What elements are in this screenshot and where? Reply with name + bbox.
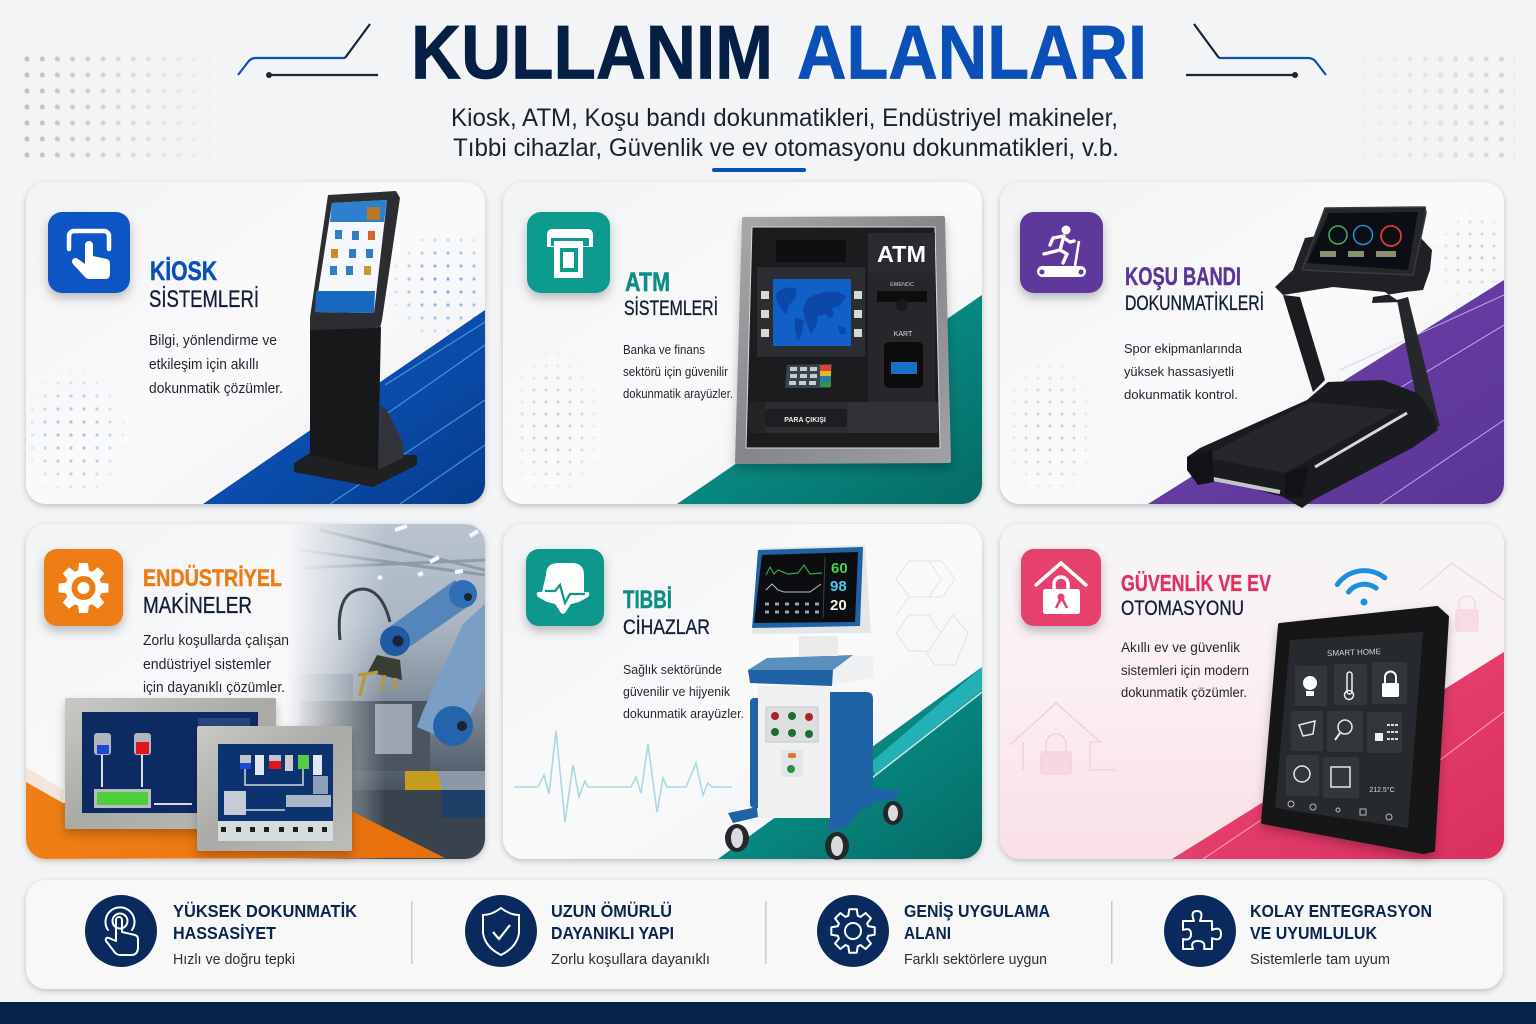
security heading: GÜVENLİK VE EV	[1121, 570, 1272, 596]
medical description	[623, 662, 744, 721]
illustration: treadmill	[1187, 207, 1440, 508]
title	[411, 10, 1147, 96]
footer band	[0, 1002, 1536, 1024]
industrial heading: ENDÜSTRİYEL	[143, 565, 282, 592]
panel: medical: CİHAZLAR	[623, 616, 710, 639]
illustration: medical device: 20	[830, 597, 847, 614]
decorative dots right	[1392, 56, 1515, 158]
panel: security and home automation	[1000, 524, 1504, 859]
illustration: ATM machine: ATM	[877, 241, 926, 267]
ATM heading: ATM	[625, 267, 670, 297]
illustration: ATM machine: EMENDC	[890, 282, 914, 288]
feature: integration: KOLAY ENTEGRASYON	[1250, 901, 1432, 921]
subtitle	[451, 104, 1119, 162]
illustration: ATM machine	[737, 218, 949, 462]
industrial description: endüstriyel sistemler	[143, 657, 271, 673]
industrial description: için dayanıklı çözümler.	[143, 680, 285, 696]
hexagon pattern	[896, 561, 968, 665]
panel: treadmill: DOKUNMATİKLERİ	[1125, 292, 1264, 315]
feature: touch sensitivity	[85, 895, 357, 968]
illustration: medical device	[725, 545, 903, 860]
decorative dots left	[24, 56, 182, 158]
security description: sistemleri için modern	[1121, 663, 1249, 678]
icon: runner on treadmill	[1020, 212, 1103, 293]
illustration: smart home tablet: SMART HOME	[1327, 647, 1381, 658]
feature: touch sensitivity: YÜKSEK DOKUNMATİK	[173, 901, 357, 921]
feature: touch sensitivity: Hızlı ve doğru tepki	[173, 951, 295, 968]
kiosk description	[149, 333, 283, 397]
security description: dokunmatik çözümler.	[1121, 685, 1247, 700]
ATM description	[623, 343, 733, 401]
panel: medical	[503, 524, 982, 860]
kiosk description: etkileşim için akıllı	[149, 357, 259, 373]
treadmill description: Spor ekipmanlarında	[1124, 341, 1243, 356]
ATM description: dokunmatik arayüzler.	[623, 387, 733, 401]
treadmill heading: KOŞU BANDI	[1125, 263, 1241, 291]
security description	[1121, 640, 1249, 700]
subtitle: Tıbbi cihazlar, Güvenlik ve ev otomasyonu dokunmatikleri, v.b.	[453, 134, 1119, 162]
title: ALANLARI	[797, 10, 1147, 96]
illustration: medical device: 98	[830, 578, 847, 595]
treadmill description	[1124, 341, 1243, 402]
feature: durability	[465, 895, 710, 968]
illustration: HMI panel small	[197, 726, 352, 851]
feature: integration: Sistemlerle tam uyum	[1250, 951, 1390, 968]
panel: kiosk	[20, 182, 505, 504]
illustration: ATM machine: KART	[894, 331, 913, 338]
subtitle: Kiosk, ATM, Koşu bandı dokunmatikleri, Endüstriyel makineler,	[451, 104, 1118, 132]
background house and lock left	[1010, 703, 1115, 774]
ECG line	[514, 731, 732, 822]
illustration: medical device: 60	[831, 560, 848, 577]
panel: treadmill	[1000, 182, 1520, 508]
medical heading: TIBBİ	[623, 586, 672, 614]
feature: durability: Zorlu koşullara dayanıklı	[551, 951, 710, 968]
icon: heart pulse	[526, 549, 604, 626]
illustration: kiosk	[294, 191, 417, 487]
robot arm	[339, 580, 485, 818]
icon: home lock	[1021, 549, 1101, 626]
icon: gear	[44, 549, 123, 626]
feature: touch sensitivity: HASSASİYET	[173, 923, 276, 943]
panel: ATM	[503, 182, 982, 504]
feature: durability: DAYANIKLI YAPI	[551, 923, 674, 943]
title underline	[712, 168, 806, 172]
icon: card slot	[527, 212, 610, 293]
feature: wide application: GENİŞ UYGULAMA	[904, 901, 1050, 921]
background house and lock right	[1420, 563, 1504, 631]
feature: wide application	[817, 895, 1050, 968]
feature: integration: VE UYUMLULUK	[1250, 923, 1377, 943]
industrial description: Zorlu koşullarda çalışan	[143, 633, 289, 649]
medical description: dokunmatik arayüzler.	[623, 706, 744, 721]
kiosk description: dokunmatik çözümler.	[149, 381, 283, 397]
illustration: smart home tablet: 212.5°C	[1369, 786, 1395, 794]
ATM description: Banka ve finans	[623, 343, 705, 357]
panel: kiosk: SİSTEMLERİ	[149, 286, 259, 313]
illustration: smart home tablet	[1263, 608, 1447, 852]
icon: wifi	[1336, 568, 1388, 609]
panel: security and home automation: OTOMASYONU	[1121, 597, 1244, 620]
title: KULLANIM	[411, 10, 773, 96]
feature bar	[26, 880, 1503, 989]
circuit line right	[1186, 24, 1326, 78]
security description: Akıllı ev ve güvenlik	[1121, 640, 1240, 655]
ATM description: sektörü için güvenilir	[623, 365, 728, 379]
feature: durability: UZUN ÖMÜRLÜ	[551, 901, 672, 921]
treadmill description: dokunmatik kontrol.	[1124, 387, 1238, 402]
illustration: HMI panel large	[65, 698, 276, 829]
circuit line left	[238, 24, 378, 78]
panel: industrial: MAKİNELER	[143, 592, 252, 618]
kiosk heading: KİOSK	[150, 256, 217, 286]
feature: wide application: Farklı sektörlere uygun	[904, 951, 1047, 968]
icon: touch screen	[48, 212, 130, 293]
industrial description	[143, 633, 289, 696]
illustration: ATM machine: PARA ÇIKIŞI	[784, 417, 826, 424]
medical description: Sağlık sektöründe	[623, 662, 722, 677]
factory background	[280, 524, 485, 859]
feature: wide application: ALANI	[904, 923, 951, 943]
kiosk description: Bilgi, yönlendirme ve	[149, 333, 277, 349]
medical description: güvenilir ve hijyenik	[623, 684, 731, 699]
panel: industrial	[26, 524, 485, 859]
treadmill description: yüksek hassasiyetli	[1124, 364, 1234, 379]
panel: ATM: SİSTEMLERİ	[624, 297, 718, 320]
feature: integration	[1164, 895, 1432, 968]
